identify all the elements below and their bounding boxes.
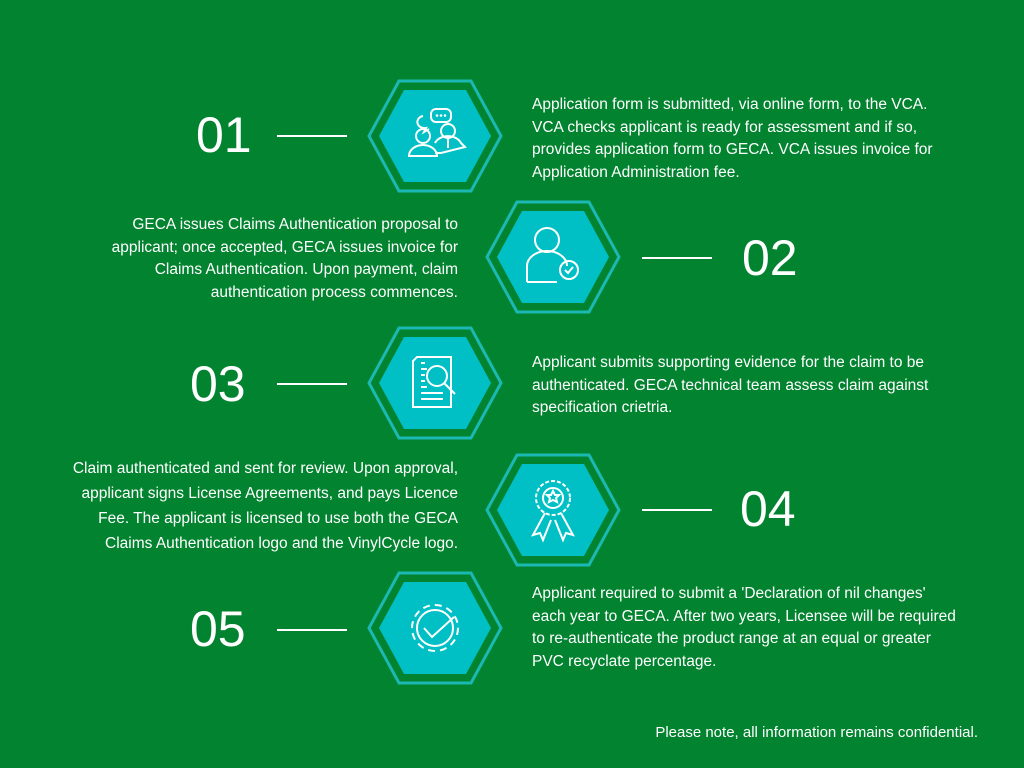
step 04 number: 04 bbox=[740, 481, 796, 537]
step 01 text bbox=[532, 96, 933, 181]
hexagon 02 with icon: person check bbox=[487, 202, 619, 312]
step 01 text: provides application form to GECA. VCA issues invoice for bbox=[532, 141, 933, 158]
step 03 text bbox=[532, 354, 928, 416]
step 01 text: Application form is submitted, via online form, to the VCA. bbox=[532, 96, 927, 113]
step 05 text: to re-authenticate the product range at an equal or greater bbox=[532, 630, 931, 647]
step 05 text: PVC recyclate percentage. bbox=[532, 653, 716, 670]
step 02 number: 02 bbox=[742, 230, 798, 286]
step 05 text bbox=[532, 585, 956, 670]
step 01 text: Application Administration fee. bbox=[532, 164, 740, 181]
step 04 text: Claim authenticated and sent for review. Upon approval, bbox=[73, 460, 458, 477]
step 04 text: Fee. The applicant is licensed to use both the GECA bbox=[98, 510, 458, 527]
step 04 text: Claims Authentication logo and the VinylCycle logo. bbox=[105, 535, 458, 552]
hexagon 04 with icon: award ribbon bbox=[487, 455, 619, 565]
step 03 text: authenticated. GECA technical team assess claim against bbox=[532, 377, 928, 394]
step 03 number: 03 bbox=[190, 356, 246, 412]
step 01 text: VCA checks applicant is ready for assessment and if so, bbox=[532, 119, 917, 136]
step 01 number: 01 bbox=[196, 107, 252, 163]
step 04 text: applicant signs License Agreements, and pays Licence bbox=[81, 485, 458, 502]
step 05 text: Applicant required to submit a 'Declaration of nil changes' bbox=[532, 585, 926, 602]
step 02 text bbox=[112, 216, 458, 301]
step 02 text: applicant; once accepted, GECA issues invoice for bbox=[112, 239, 458, 256]
step 03 text: Applicant submits supporting evidence for the claim to be bbox=[532, 354, 924, 371]
step 05 text: each year to GECA. After two years, Licensee will be required bbox=[532, 608, 956, 625]
step 02 text: GECA issues Claims Authentication proposal to bbox=[132, 216, 458, 233]
step 05 number: 05 bbox=[190, 601, 246, 657]
hexagon 05 with icon: gear check bbox=[369, 573, 501, 683]
step 04 text bbox=[73, 460, 458, 552]
step 02 text: authentication process commences. bbox=[211, 284, 458, 301]
hexagon 01 with icon: meeting bbox=[369, 81, 501, 191]
step 03 text: specification crietria. bbox=[532, 399, 672, 416]
footer note: Please note, all information remains confidential. bbox=[655, 724, 978, 741]
hexagon 03 with icon: document search bbox=[369, 328, 501, 438]
step 02 text: Claims Authentication. Upon payment, claim bbox=[155, 261, 458, 278]
